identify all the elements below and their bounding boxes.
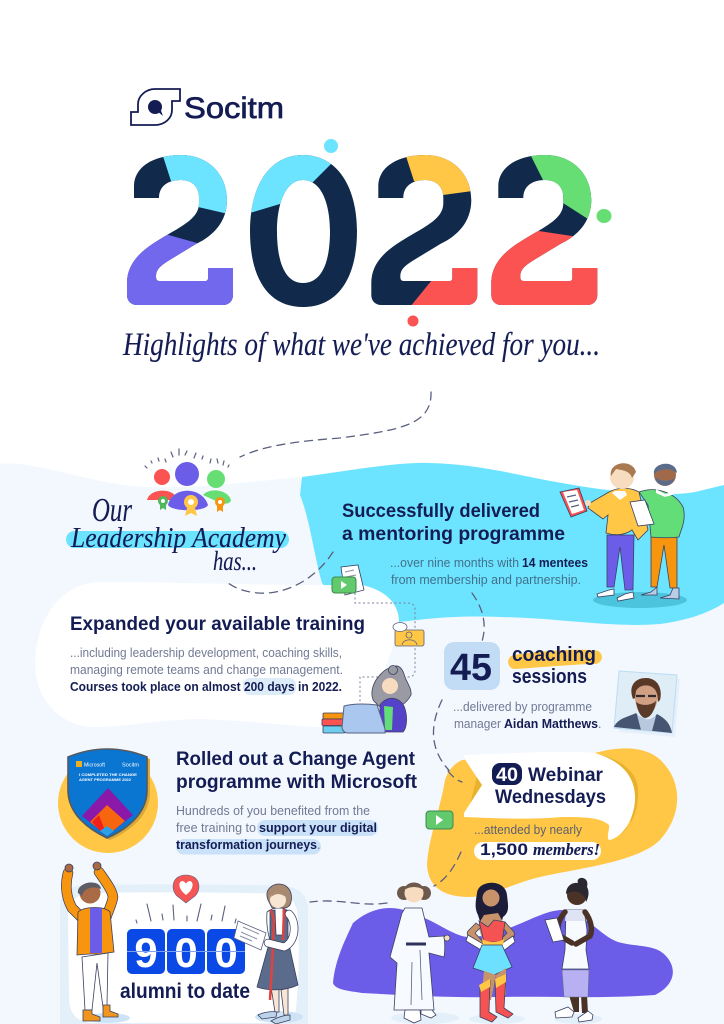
icon: document and green play button [332,565,364,595]
icon: Microsoft badge: Socitm [122,762,139,768]
text block: mentoring: Successfully delivered [342,501,540,522]
icon: yellow video call [393,622,424,646]
callout: 45 coaching sessions [444,642,602,731]
icon: Microsoft badge: I COMPLETED THE CHANGE [79,773,138,777]
fourth digit 2 [491,155,598,305]
text block: change agent: . [317,838,320,852]
white banner [464,752,635,840]
illustration: princess in white robe [390,882,459,1024]
text block: change agent: Rolled out a Change Agent [176,749,416,770]
panel: 900 alumni card [60,884,308,1024]
dashed connector over yellow blob [434,852,461,886]
illustration: man cheering in orange jacket [65,862,130,1023]
text block: change agent: transformation journeys [176,838,317,852]
white tablet [630,500,654,526]
certificate [234,921,266,950]
icon: green play button [426,811,453,829]
text block: change agent [176,749,418,854]
Socitm logo: Socitm [184,92,284,125]
yellow man [585,463,648,601]
panel: webinar yellow blob [427,748,677,897]
text block: mentoring: 14 mentees [522,556,588,570]
books [322,713,345,733]
callout: 45 coaching sessions: coaching [512,644,596,666]
flip digits: 0 [214,929,238,976]
illustration: woman with certificate [234,884,303,1024]
panel: training white blob [35,582,399,727]
dashed connector: tagline to academy [240,392,431,457]
dashed connector: coaching to webinars [433,700,462,782]
Our Leadership Academy heading: has... [213,546,257,576]
text block: training [70,614,365,695]
callout: 45 coaching sessions: 45 [450,647,492,689]
text block: training: ...including leadership development, coaching skills, [70,646,342,660]
digit 0 [250,155,357,307]
third digit 2 [371,155,478,305]
flip digits: 0 [174,929,198,976]
40 Webinar Wednesdays: Wednesdays [495,786,606,808]
900 alumni counter [120,904,250,1003]
2022 numerals [120,139,612,326]
illustration: woman at laptop with books [322,666,411,733]
panel: mentoring cyan wave [300,463,724,625]
red tablet [560,488,587,517]
text block: mentoring: a mentoring programme [342,524,565,545]
40 Webinar Wednesdays: 40 [496,765,518,786]
Our Leadership Academy heading: Our [92,492,133,529]
icon: Microsoft badge [58,749,158,853]
illustration: two mentors [560,463,687,608]
icon: heart pin [173,875,199,903]
text block: training: Expanded your available training [70,614,365,635]
text block: training: Courses took place on almost 200 days in 2022. [70,680,342,694]
1,500 members: 1,500 [480,840,528,859]
Our Leadership Academy heading: Leadership Academy [70,522,286,554]
panel: purple blob [333,908,673,997]
callout: 45 coaching sessions: . [598,717,601,731]
icon: Microsoft badge: AGENT PROGRAMME 2022 [79,778,131,782]
text block: mentoring [342,501,588,587]
flip digits [127,929,245,976]
flip digits: 9 [134,929,158,976]
dashed connector: characters to alumni [310,901,387,904]
callout: 45 coaching sessions: sessions [512,666,587,688]
pale blue background wave [0,463,724,1024]
green man [639,464,684,599]
text block: change agent: support your digital [259,821,377,835]
panel: alumni inner white [68,892,299,1023]
text block: change agent: free training to [176,821,256,835]
illustration: woman with tablet [545,878,602,1024]
text block: training: managing remote teams and change management. [70,663,343,677]
ticks [136,904,236,923]
first digit 2 [127,155,233,305]
tagline: Highlights of what we've achieved for you... [122,327,600,363]
callout: 45 coaching sessions: Aidan Matthews [504,717,598,731]
panel: webinar yellow blob: ...attended by nearly [474,823,583,837]
text block: mentoring: ...over nine months with [390,556,519,570]
dashed connector: mentoring to academy title [228,552,333,593]
text block: mentoring: from membership and partnership. [391,573,581,587]
icon: academy team with medals [145,449,231,516]
1,500 members [474,840,601,860]
dashed connector: mentoring to coaching [472,593,484,647]
Our Leadership Academy heading [66,492,289,576]
40 Webinar Wednesdays: Webinar [528,764,603,786]
dotted connector: training icons [355,593,415,703]
text block: change agent: programme with Microsoft [176,772,418,793]
callout: 45 coaching sessions: ...delivered by programme [453,700,592,714]
icon: Microsoft badge: Microsoft [84,762,106,768]
callout: 45 coaching sessions: manager [454,717,501,731]
photo: Aidan Matthews [614,671,680,737]
dashed connector into banner [448,771,462,782]
40 Webinar Wednesdays [492,763,606,808]
illustration: superhero woman [466,883,525,1024]
900 alumni counter: alumni to date [120,980,250,1003]
text block: change agent: Hundreds of you benefited from the [176,804,370,818]
1,500 members: members! [533,840,600,859]
Socitm logo [131,89,284,125]
